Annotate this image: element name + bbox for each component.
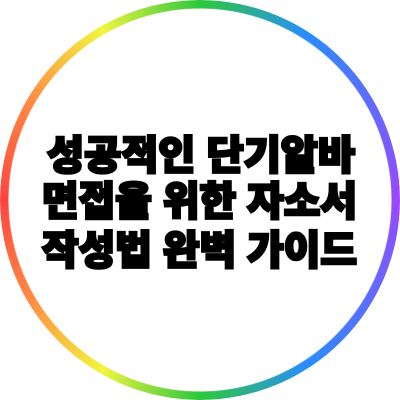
title line 3: 작성법 완벽 가이드 xyxy=(42,229,357,273)
title line 1: 성공적인 단기알바 xyxy=(47,134,355,178)
title line 2: 면접을 위한 자소서 xyxy=(42,180,357,224)
